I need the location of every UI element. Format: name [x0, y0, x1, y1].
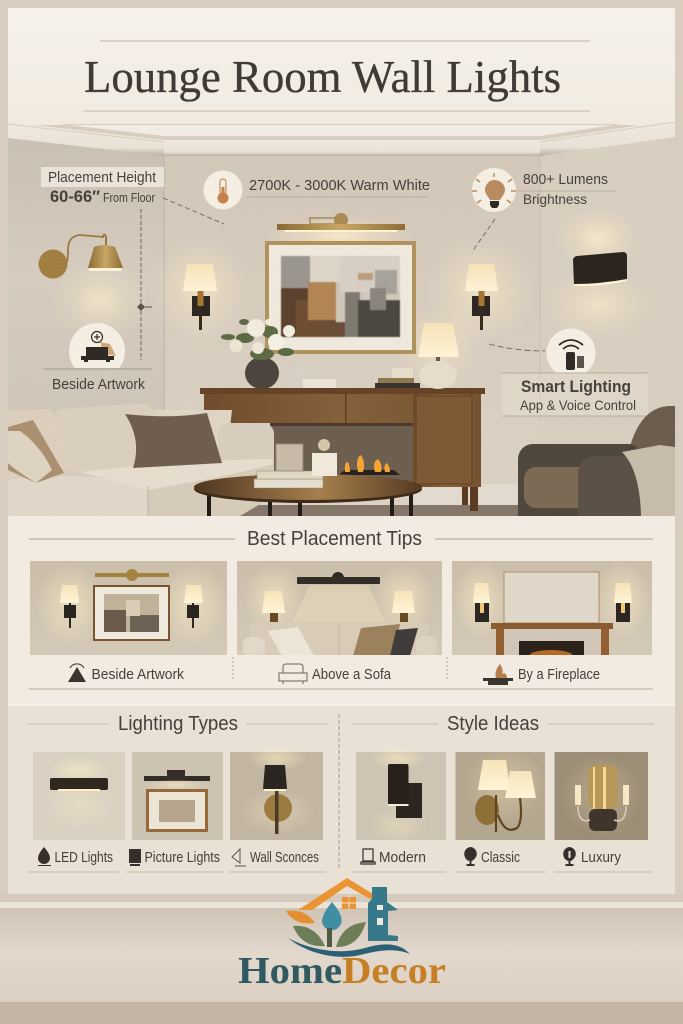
left wall sconce	[183, 264, 217, 330]
heading: lighting types: Lighting Types	[118, 713, 238, 735]
thumbnail: beside artwork	[30, 561, 228, 655]
framed abstract artwork	[265, 241, 416, 354]
caption: beside artwork	[68, 664, 184, 683]
sofa back and arm	[8, 404, 274, 464]
panel: best placement tips	[8, 516, 675, 703]
caption: classic: Classic	[481, 850, 520, 866]
icon: sofa with plus in circle	[69, 323, 125, 368]
thumbnail: above a sofa	[237, 561, 442, 662]
caption: picture lights: Picture Lights	[144, 850, 220, 866]
dark brown cushion	[125, 413, 222, 468]
annotation: placement height	[41, 167, 224, 360]
swing arm brass wall light	[38, 234, 123, 278]
icon: luxury lamp	[563, 847, 576, 866]
logo wordmark: HomeDecor	[238, 950, 446, 992]
logo: HomeDecor	[238, 878, 446, 992]
logo house mark	[286, 878, 410, 957]
modern black wall washer light	[573, 252, 627, 286]
caption: wall sconces: Wall Sconces	[250, 850, 319, 866]
icon: sconce outline	[232, 849, 246, 866]
caption: picture lights	[129, 849, 220, 866]
annotation: beside artwork: Beside Artwork	[52, 376, 145, 393]
caption: wall sconces	[232, 849, 319, 866]
title: Lounge Room Wall Lights	[84, 51, 561, 102]
annotation: placement height: 60-66″	[50, 187, 100, 206]
annotation: smart lighting	[489, 328, 648, 416]
icon: arch lamp	[68, 664, 86, 682]
caption: luxury	[563, 847, 622, 866]
icon: drop	[38, 847, 51, 866]
annotation: placement height: Placement Height	[48, 170, 156, 186]
header panel	[8, 8, 675, 124]
annotation: colour temperature	[204, 170, 430, 210]
icon: wifi and remote	[546, 328, 596, 372]
thumbnail: modern	[356, 746, 446, 845]
icon: light bulb	[472, 168, 516, 212]
icon: picture light	[129, 849, 141, 866]
heading: best placement tips: Best Placement Tips	[247, 528, 422, 550]
console with fireplace	[200, 388, 485, 511]
table lamp	[418, 323, 459, 389]
caption: modern: Modern	[379, 850, 426, 866]
icon: modern lamp	[361, 849, 375, 864]
panel: lighting types and style ideas	[8, 703, 675, 894]
thumbnail: classic	[456, 747, 547, 840]
wall light glows	[70, 218, 629, 363]
caption: above a sofa: Above a Sofa	[312, 666, 392, 683]
icon: sofa outline	[279, 664, 307, 684]
right wall sconce	[465, 264, 498, 330]
annotation: lumens	[472, 168, 616, 252]
room walls and ceiling moulding	[8, 122, 675, 420]
caption: classic	[464, 847, 520, 866]
annotation: placement height: From Floor	[103, 191, 155, 205]
caption: luxury: Luxury	[581, 850, 622, 866]
caption: above a sofa	[279, 664, 392, 684]
caption: led lights	[38, 847, 113, 866]
thumbnail: picture light	[132, 752, 223, 840]
annotation: lumens: 800+ Lumens	[523, 172, 608, 188]
caption: led lights: LED Lights	[54, 850, 113, 866]
footer panel	[0, 894, 683, 1024]
annotation: smart lighting: Smart Lighting	[521, 377, 631, 396]
icon: thermometer	[204, 170, 242, 210]
armchair with throw	[518, 406, 675, 516]
left cushions	[8, 420, 64, 483]
thumbnail: led light	[33, 752, 125, 840]
icon: classic lamp	[464, 847, 477, 866]
annotation: lumens: Brightness	[523, 191, 587, 207]
annotation: beside artwork	[44, 323, 152, 393]
panel: room scene	[8, 116, 675, 536]
wall texture grain	[8, 155, 675, 515]
thumbnail: wall sconce	[230, 744, 323, 840]
cream sofa with cushions	[8, 404, 274, 516]
thumbnail: luxury	[554, 752, 648, 840]
sofa seat cushions	[8, 459, 274, 516]
icon: flame on tray	[483, 664, 513, 685]
annotation: colour temperature: 2700K - 3000K Warm White	[249, 177, 430, 194]
vase and flowers	[221, 319, 295, 389]
decor on console: vase, flowers, books, lamp	[221, 319, 459, 389]
thumbnail: by a fireplace	[452, 560, 652, 662]
picture light	[277, 213, 405, 232]
caption: by a fireplace	[483, 664, 600, 685]
fire flames	[345, 455, 390, 472]
annotation: smart lighting: App & Voice Control	[520, 397, 636, 413]
heading: style ideas: Style Ideas	[447, 713, 539, 735]
baseboard and floor	[240, 484, 518, 516]
caption: by a fireplace: By a Fireplace	[518, 666, 600, 683]
caption: beside artwork: Beside Artwork	[92, 666, 184, 683]
coffee table with books and candles	[194, 439, 422, 516]
caption: modern	[361, 849, 426, 866]
